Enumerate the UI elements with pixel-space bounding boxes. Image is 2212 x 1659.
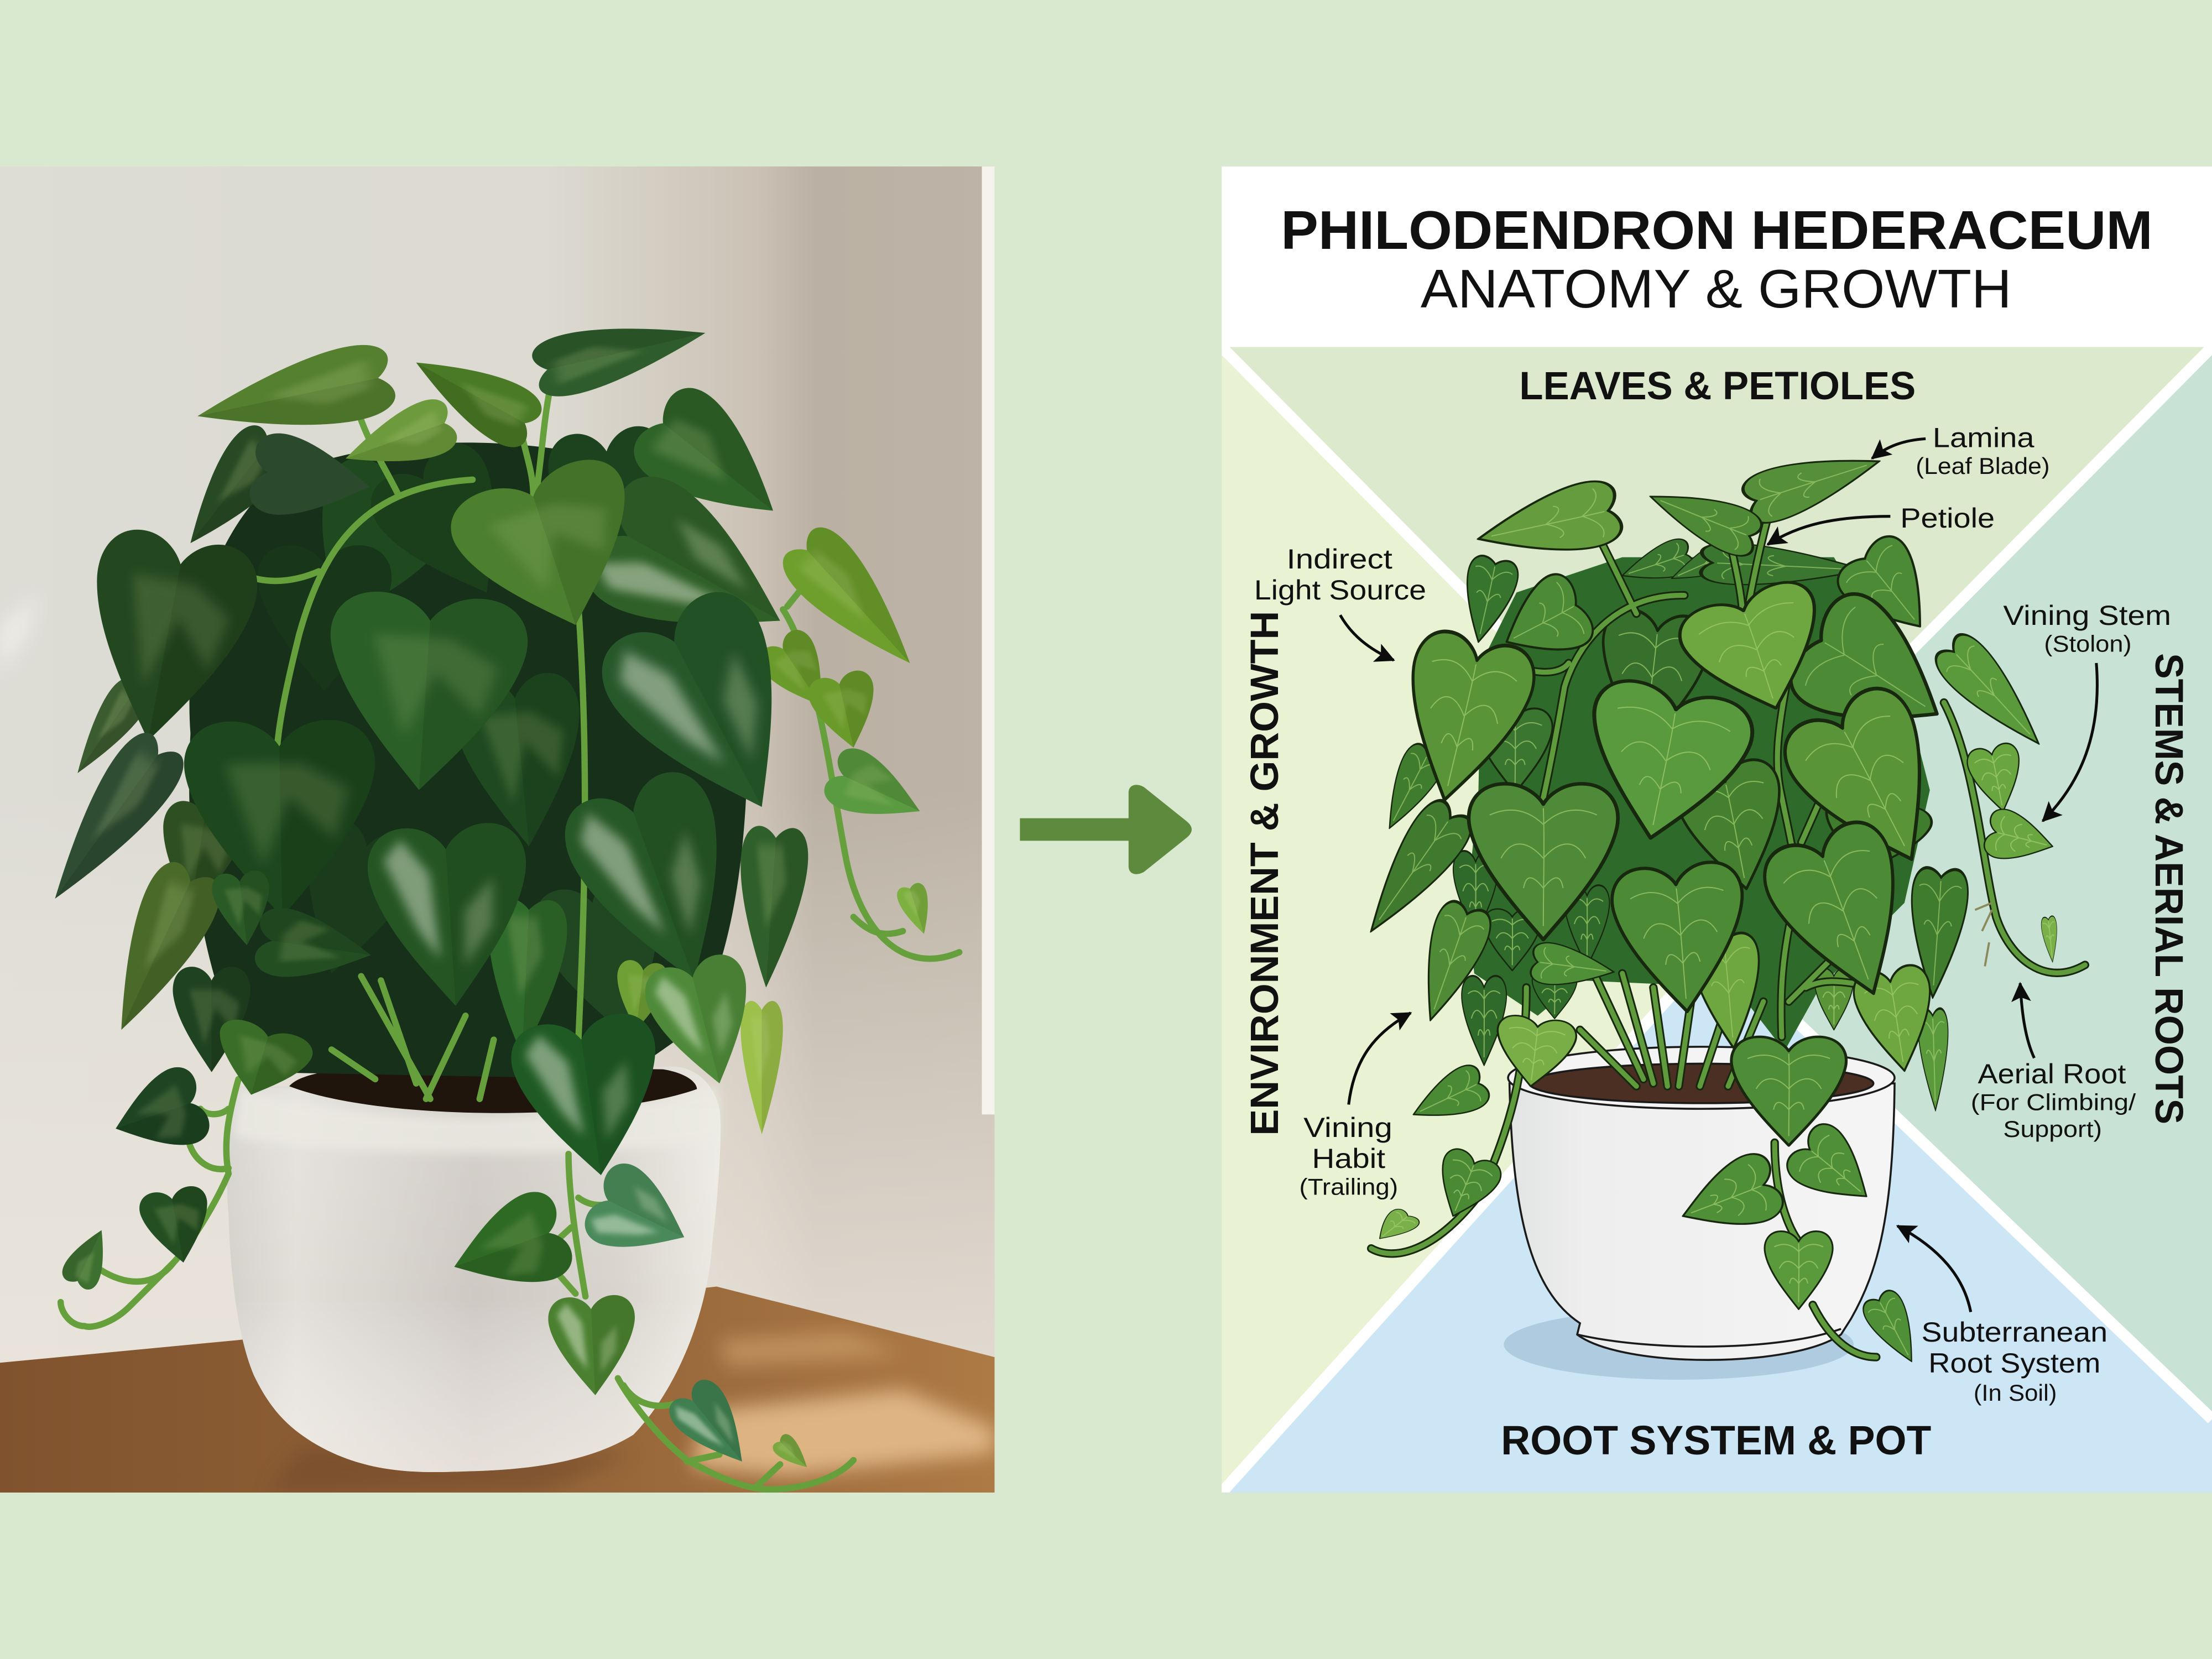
callout: subterranean root system (1897, 1226, 2107, 1406)
wall lower tone (0, 885, 994, 1363)
heading: stems and aerial roots: STEMS & AERIAL ROOTS (2147, 653, 2191, 1124)
callout: aerial root (1971, 983, 2136, 1142)
background foliage (257, 423, 687, 1052)
photo leaves (28, 303, 938, 1480)
callout: vining habit (1299, 1013, 1411, 1200)
foliage mass (1467, 557, 1930, 1051)
callout: indirect light source: Light Source (1254, 575, 1426, 606)
callout: vining stem: Vining Stem (2003, 600, 2171, 631)
quadrant: root system and pot (1222, 945, 2212, 1493)
callout: subterranean root system: Subterranean (1921, 1317, 2107, 1348)
white diagonal dividers (1222, 347, 2212, 1493)
foliage mass (189, 442, 749, 1079)
illustrated pot (1508, 1047, 1895, 1360)
heading: root system and pot: ROOT SYSTEM & POT (1501, 1417, 1931, 1463)
stem fill (1371, 508, 2085, 1357)
pot shadow on table (268, 1446, 635, 1493)
callout: aerial root: (For Climbing/ (1971, 1089, 2136, 1115)
stems (1371, 508, 2085, 1357)
callout: subterranean root system: Root System (1928, 1348, 2100, 1379)
heading: leaves and petioles: LEAVES & PETIOLES (1519, 364, 1916, 408)
soil (289, 1067, 697, 1113)
aerial rootlets (1975, 903, 1992, 966)
wooden table (0, 1287, 994, 1493)
title (1281, 200, 2153, 319)
panel: plant photograph (0, 166, 994, 1493)
sunlight streak on table (719, 1333, 903, 1365)
callout: lamina: (Leaf Blade) (1916, 453, 2050, 479)
callout: aerial root: Aerial Root (1978, 1058, 2126, 1089)
callout: lamina (1872, 422, 2050, 479)
quadrant: stems and aerial roots (1717, 347, 2212, 1419)
callout: lamina: Lamina (1933, 422, 2034, 453)
pot shadow (1504, 1309, 1854, 1380)
callout: vining habit: Habit (1312, 1143, 1385, 1174)
wall (0, 166, 994, 1357)
callout: subterranean root system: (In Soil) (1974, 1380, 2057, 1406)
callout: vining habit: Vining (1303, 1112, 1392, 1143)
heading: environment and growth: ENVIRONMENT & GROWTH (1243, 611, 1287, 1136)
arrow: photo to diagram (1020, 785, 1192, 874)
panel: anatomy diagram (1222, 166, 2212, 1493)
title line 1: PHILODENDRON HEDERACEUM (1281, 200, 2153, 260)
callout: indirect light source (1254, 544, 1426, 660)
callout: aerial root: Support) (2003, 1116, 2102, 1142)
photo stems (61, 388, 959, 1489)
title line 2: ANATOMY & GROWTH (1421, 258, 2012, 319)
wall light patch (0, 608, 32, 657)
callout: petiole (1767, 503, 1995, 545)
quadrant: leaves and petioles (1222, 347, 2212, 847)
callout: vining stem: (Stolon) (2044, 631, 2132, 657)
callout: petiole: Petiole (1900, 503, 1995, 534)
callout: indirect light source: Indirect (1287, 544, 1392, 575)
header background (1222, 166, 2212, 347)
callout: vining stem (2003, 600, 2171, 821)
window light strip (982, 166, 994, 1114)
background leaves (1371, 529, 1950, 1065)
white ceramic pot (227, 1066, 721, 1472)
illustrated leaves (1348, 437, 2060, 1371)
sunlight on table (691, 1390, 994, 1475)
quadrant: environment and growth (1222, 347, 1717, 1493)
callout: vining habit: (Trailing) (1299, 1174, 1398, 1200)
